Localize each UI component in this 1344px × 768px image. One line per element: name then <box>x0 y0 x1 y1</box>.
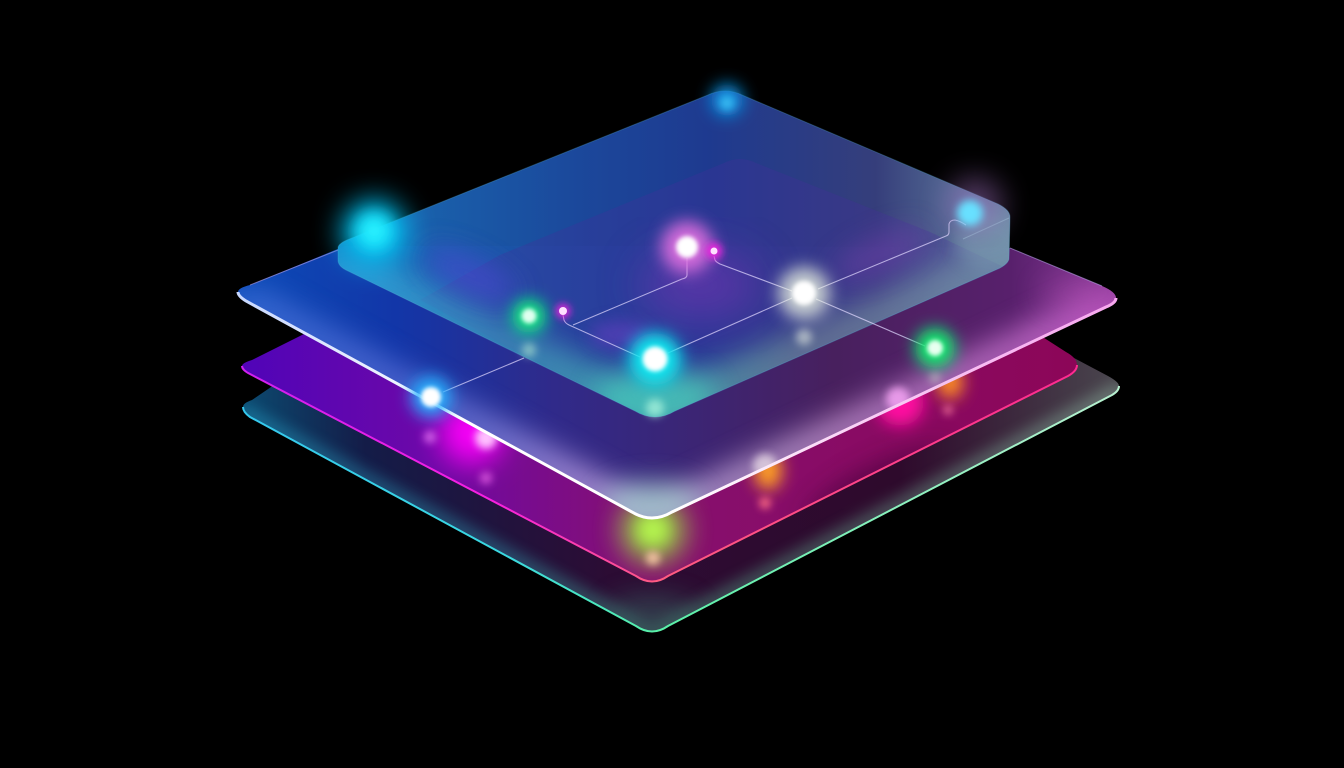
glow node: right pale blue corner <box>947 177 1003 233</box>
middle layer plate: purple to magenta <box>242 316 1077 582</box>
inner raised diamond <box>443 159 1002 366</box>
upper layer plate: blue to violet with white edge <box>238 246 1130 527</box>
small node: magenta lower <box>556 304 570 318</box>
illustration: stacked isometric glass layers <box>236 72 1120 632</box>
glow node: blue-white on plate edge <box>411 377 451 417</box>
glow node: cyan-white centre <box>629 333 681 385</box>
bottom layer plate: teal to green <box>243 340 1119 632</box>
small node: magenta upper <box>706 243 722 259</box>
glow node: white centre-right <box>778 267 830 319</box>
glow spots on middle layer <box>424 365 963 565</box>
glow node: top blue corner <box>711 84 743 116</box>
node reflections <box>522 329 941 417</box>
glass box on top <box>338 91 1025 424</box>
glow node: cyan corner <box>342 200 406 264</box>
circuit lines <box>443 220 966 392</box>
glow node: green right <box>915 328 955 368</box>
glow node: green left <box>512 299 546 333</box>
thin top rim of upper plate <box>250 248 1102 286</box>
glow node: white-magenta <box>661 221 713 273</box>
